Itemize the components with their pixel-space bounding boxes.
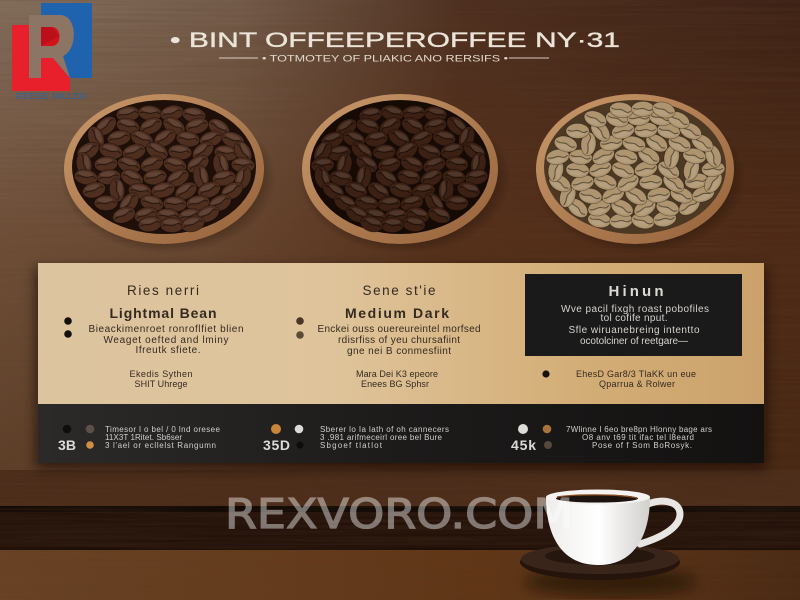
coffee cup and saucer — [520, 490, 695, 596]
column: medium dark: Mara Dei K3 epeore — [356, 369, 438, 379]
stat: 3B — [58, 425, 221, 453]
column: light bean: Bieackimenroet ronroflfiet blien — [88, 324, 244, 335]
stat: 3B: 3 l'ael or ecllelst Rangumn — [105, 441, 216, 450]
panel: dark footer strip — [38, 404, 764, 463]
stat: 35D: 3 .981 arifmeceirl oree bel Bure — [320, 433, 443, 442]
stat: 35D: Sbgoef tlatlot — [320, 441, 383, 450]
column: light bean: Ifreutk sfiete. — [136, 345, 200, 356]
bowl: dark roast beans — [60, 94, 276, 254]
subtitle with rules: • TOTMOTEY OF PLIAKIC ANO RERSIFS • — [262, 54, 508, 64]
title: • BINT OFFEEPEROFFEE NY·31 — [170, 29, 620, 52]
column: light bean: Ekedis Sythen — [130, 369, 192, 379]
panel: wood board — [38, 263, 764, 404]
callout: black box: Hinun — [608, 283, 664, 300]
stat: 35D — [263, 424, 449, 453]
callout: black box — [525, 274, 742, 356]
column: light bean: SHIT Uhrege — [134, 379, 188, 389]
stat: 3B: Timesor l o bel / 0 lnd oresee — [105, 425, 221, 434]
logo: Reese Miller: REESE MILLER — [16, 92, 87, 101]
column: light bean: Ries nerri — [127, 283, 199, 298]
column: medium dark: Sene st'ie — [362, 283, 436, 298]
callout: black box: ocotolciner of reetgare— — [580, 336, 688, 347]
stat: 35D: 35D — [263, 437, 290, 453]
column: medium dark: Medium Dark — [345, 305, 449, 321]
callout: black box: Wve pacil fixgh roast pobofiles — [561, 304, 709, 315]
column: medium dark — [318, 283, 480, 389]
logo: Reese Miller — [12, 3, 92, 101]
callout: black box: tol cofife nput. — [600, 313, 668, 324]
column: medium dark: gne nei B conmesfiint — [347, 346, 451, 357]
bowl: medium dark beans — [299, 94, 511, 254]
stat: 45k: O8 anv t69 tit ifac tel l8eard — [582, 433, 694, 442]
watermark: REXVORO.COM — [225, 490, 573, 538]
column: medium dark: Enckei ouss ouereureintel morfsed — [318, 324, 480, 335]
bullets: medium dark — [296, 317, 304, 339]
bowl: light green beans — [534, 94, 746, 254]
stat: 45k: 7Wlinne I 6eo bre8pn Hlonny bage ars — [566, 425, 712, 434]
note: third column — [542, 369, 696, 389]
stat: 45k: 45k — [511, 437, 536, 453]
stat: 3B: 3B — [58, 437, 76, 453]
note: third column: Qparrua & Rolwer — [599, 379, 675, 389]
column: light bean: Lightmal Bean — [110, 305, 216, 321]
column: medium dark: Enees BG Sphsr — [361, 379, 429, 389]
info board — [36, 263, 766, 468]
note: third column: EhesD Gar8/3 TlaKK un eue — [576, 369, 696, 379]
stat: 35D: Sberer lo Ia lath of oh cannecers — [320, 425, 449, 434]
column: medium dark: rdisrfiss of yeu chursafiint — [338, 335, 460, 346]
stat: 45k — [511, 424, 712, 453]
stat: 3B: 11X3T 1Ritet. Sb6ser — [105, 433, 182, 442]
bullets: light bean — [64, 317, 72, 338]
callout: black box: Sfle wiruanebreing intentto — [568, 325, 700, 336]
column: light bean — [88, 283, 244, 389]
column: light bean: Weaget oefted and lminy — [104, 335, 228, 346]
stat: 45k: Pose of f Som BoRosyk. — [592, 441, 692, 450]
